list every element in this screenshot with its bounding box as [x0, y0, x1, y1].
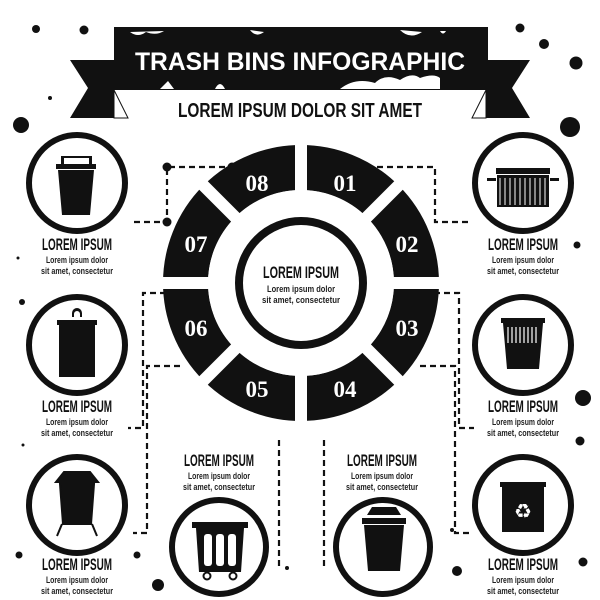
labels: Lorem ipsum dolor	[351, 471, 413, 481]
ring chart: 06	[184, 316, 208, 341]
title banner	[70, 27, 530, 118]
subtitle: LOREM IPSUM DOLOR SIT AMET	[178, 100, 422, 122]
labels: sit amet, consectetur	[487, 586, 559, 596]
center text: Lorem ipsum dolor	[267, 284, 335, 294]
labels: sit amet, consectetur	[41, 586, 113, 596]
labels: Lorem ipsum dolor	[46, 255, 108, 265]
icons	[56, 156, 559, 580]
ring chart: 07	[184, 232, 208, 257]
labels: LOREM IPSUM	[42, 397, 112, 416]
labels: Lorem ipsum dolor	[492, 255, 554, 265]
labels: Lorem ipsum dolor	[492, 417, 554, 427]
labels: LOREM IPSUM	[347, 451, 417, 470]
labels: LOREM IPSUM	[42, 555, 112, 574]
center text: LOREM IPSUM	[263, 263, 339, 282]
center text	[239, 221, 363, 345]
center text: sit amet, consectetur	[262, 295, 340, 305]
ring chart: 04	[334, 377, 357, 402]
ring chart: 01	[334, 171, 356, 196]
labels: Lorem ipsum dolor	[46, 417, 108, 427]
labels: sit amet, consectetur	[487, 428, 559, 438]
labels: Lorem ipsum dolor	[46, 575, 108, 585]
labels: sit amet, consectetur	[346, 482, 418, 492]
ring chart: 05	[246, 377, 268, 402]
labels	[41, 235, 559, 596]
icons: ♻	[514, 499, 532, 523]
ring chart	[151, 133, 451, 433]
title banner: TRASH BINS INFOGRAPHIC	[135, 48, 465, 76]
labels: sit amet, consectetur	[183, 482, 255, 492]
dashed connectors	[128, 167, 474, 570]
labels: Lorem ipsum dolor	[188, 471, 250, 481]
ring chart: 08	[246, 171, 268, 196]
labels: Lorem ipsum dolor	[492, 575, 554, 585]
labels: sit amet, consectetur	[41, 266, 113, 276]
ring chart: 02	[396, 232, 418, 257]
ring chart: 03	[396, 316, 418, 341]
labels: LOREM IPSUM	[184, 451, 254, 470]
icon circles	[29, 135, 571, 594]
labels: sit amet, consectetur	[487, 266, 559, 276]
labels: sit amet, consectetur	[41, 428, 113, 438]
labels: LOREM IPSUM	[42, 235, 112, 254]
